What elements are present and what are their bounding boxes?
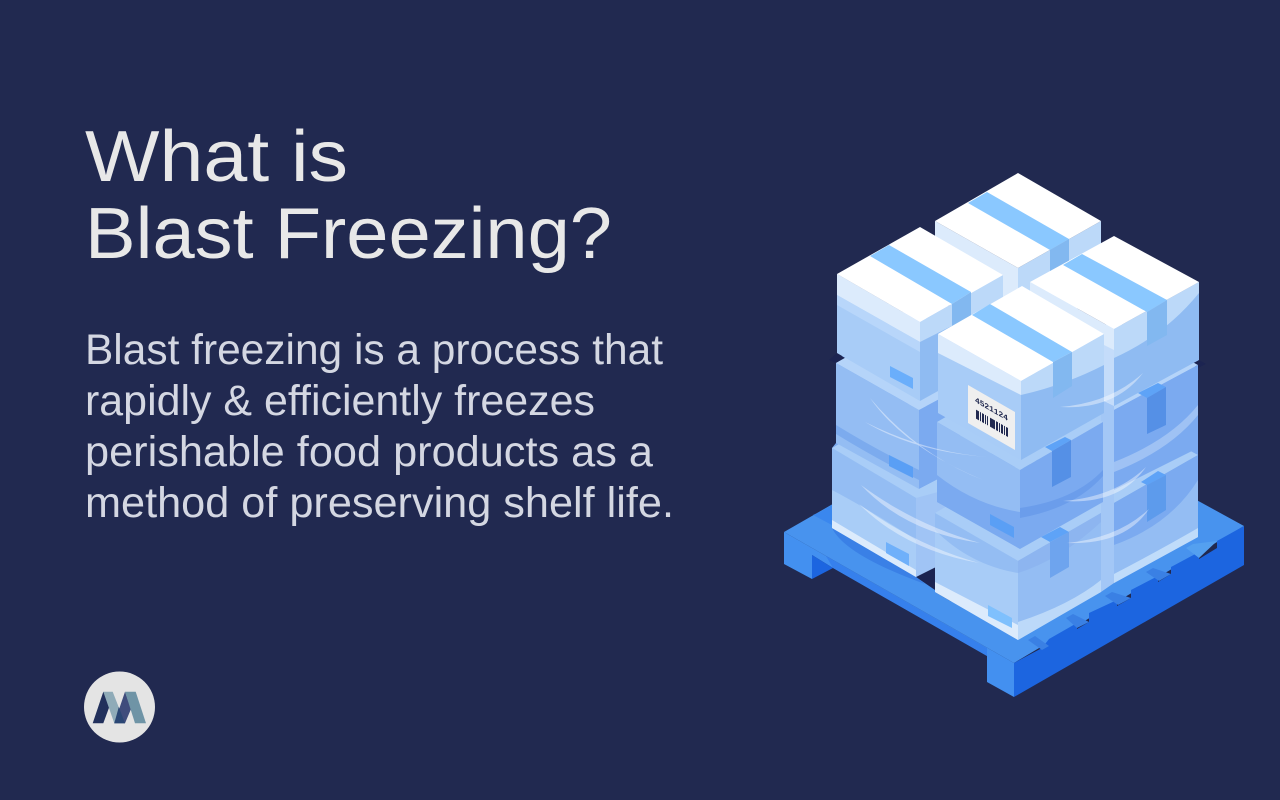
illustration: pallet with wrapped boxes — [784, 173, 1244, 697]
wrap base behind boxes — [829, 300, 1206, 640]
left stack: bottom box — [832, 400, 1000, 577]
logo — [84, 672, 155, 742]
tape on front bottom box — [1041, 527, 1069, 542]
front stack: top box — [938, 286, 1104, 460]
front stack: bottom box — [935, 465, 1101, 640]
tape on right box — [1063, 254, 1167, 312]
tape on right middle box — [1138, 383, 1166, 398]
tape on left box — [870, 245, 971, 304]
barcode label — [968, 385, 1015, 450]
title: Blast Freezing? — [85, 194, 612, 274]
description text: method of preserving shelf life. — [85, 479, 674, 527]
top box handle — [890, 366, 913, 389]
front middle handle — [990, 514, 1014, 538]
pallet — [784, 400, 1244, 697]
barcode label: 4521124 — [975, 396, 1008, 424]
description text: perishable food products as a — [85, 428, 653, 476]
stretch wrap highlights — [859, 373, 1149, 563]
tape on back box — [968, 192, 1069, 250]
front stack: middle box — [937, 374, 1103, 549]
tape on right bottom box — [1141, 471, 1166, 485]
title: What is — [85, 117, 348, 197]
tape on front middle box — [1045, 437, 1071, 451]
seam between front and right stacks — [1101, 400, 1114, 592]
back box — [935, 173, 1101, 330]
description text: Blast freezing is a process that — [85, 326, 663, 374]
description text: rapidly & efficiently freezes — [85, 377, 595, 425]
title — [85, 117, 612, 274]
front bottom handle — [988, 605, 1012, 628]
left stack: top box — [837, 227, 1003, 401]
left stack: middle box — [836, 315, 1003, 498]
right stack: middle box — [1030, 320, 1198, 490]
bottom box handle — [886, 542, 909, 566]
middle box handle — [889, 455, 913, 478]
right stack: top box — [1030, 236, 1199, 406]
right stack: bottom box — [1030, 410, 1198, 583]
tape on front box — [972, 304, 1072, 362]
description text — [85, 326, 674, 527]
